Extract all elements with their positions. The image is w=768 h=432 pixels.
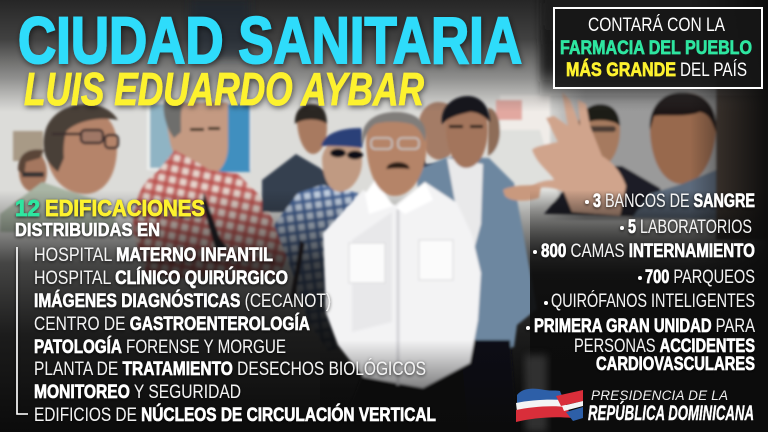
panel: facts list [526,191,755,375]
woman with cap and sunglasses [274,185,362,351]
logo: presidencia de la republica dominicana [516,388,754,425]
man with glasses head [580,106,620,166]
red plaid shirt [133,150,290,278]
fact lines [534,191,755,375]
right dark panel behind bullets [530,190,768,432]
building list: MONITOREO Y SEGURIDAD [34,382,241,403]
top right dark gradient [540,0,768,102]
callout line 1: CONTARÁ CON LA [588,15,725,36]
heading number: 12 [15,195,40,221]
fact lines: PRIMERA GRAN UNIDAD PARA [534,316,755,337]
ceiling blue-black block [190,0,250,58]
raised hand [528,92,626,216]
plans on the wall [500,95,550,165]
building list: PLANTA DE TRATAMIENTO DESECHOS BIOLÓGICOS [34,358,426,380]
floor patch between legs [525,355,547,432]
icon: dominican flag [516,389,583,422]
subheading: DISTRIBUIDAS EN [15,220,160,240]
bullet dots [526,200,642,330]
wall picture and window [13,131,43,161]
left and right dark fade [0,190,768,432]
jacket man [417,157,537,432]
building list: HOSPITAL CLÍNICO QUIRÚRGICO [34,267,288,289]
background man left [19,152,47,192]
fade over center figures [320,340,530,432]
plan and people right [490,130,560,220]
bald man behind [418,102,458,160]
building list: CENTRO DE GASTROENTEROLOGÍA [34,313,310,335]
building list: EDIFICIOS DE NÚCLEOS DE CIRCULACIÓN VERTICAL [34,404,436,426]
man in foreground right [650,92,716,184]
building list: PATOLOGÍA FORENSE Y MORGUE [34,336,286,358]
center man in white guayabera [323,96,541,432]
bracket line [17,247,28,414]
heading word: EDIFICACIONES [45,195,205,221]
white shirt [323,182,481,388]
callout line 3 end: DEL PAÍS [680,60,747,81]
building list [34,245,436,426]
right dark side of the wall [716,50,768,240]
callout: farmacia del pueblo [554,8,762,88]
face [366,112,427,196]
top dark gradient [0,0,768,112]
man with glasses, back right [545,50,768,220]
panel: 12 edificaciones [15,195,436,426]
title line 2: LUIS EDUARDO AYBAR [24,63,424,115]
building list: HOSPITAL MATERNO INFANTIL [34,245,273,266]
pants [340,363,468,432]
man behind with gray hair [166,102,228,178]
building list: IMÁGENES DIAGNÓSTICAS (CECANOT) [34,290,331,312]
logo line 1: PRESIDENCIA DE LA [591,388,728,403]
man with dark suit behind [262,154,332,212]
title line 1: CIUDAD SANITARIA [18,3,522,77]
man with glasses [0,182,124,234]
title [18,3,522,115]
callout line 3: MÁS GRANDE [566,59,676,81]
